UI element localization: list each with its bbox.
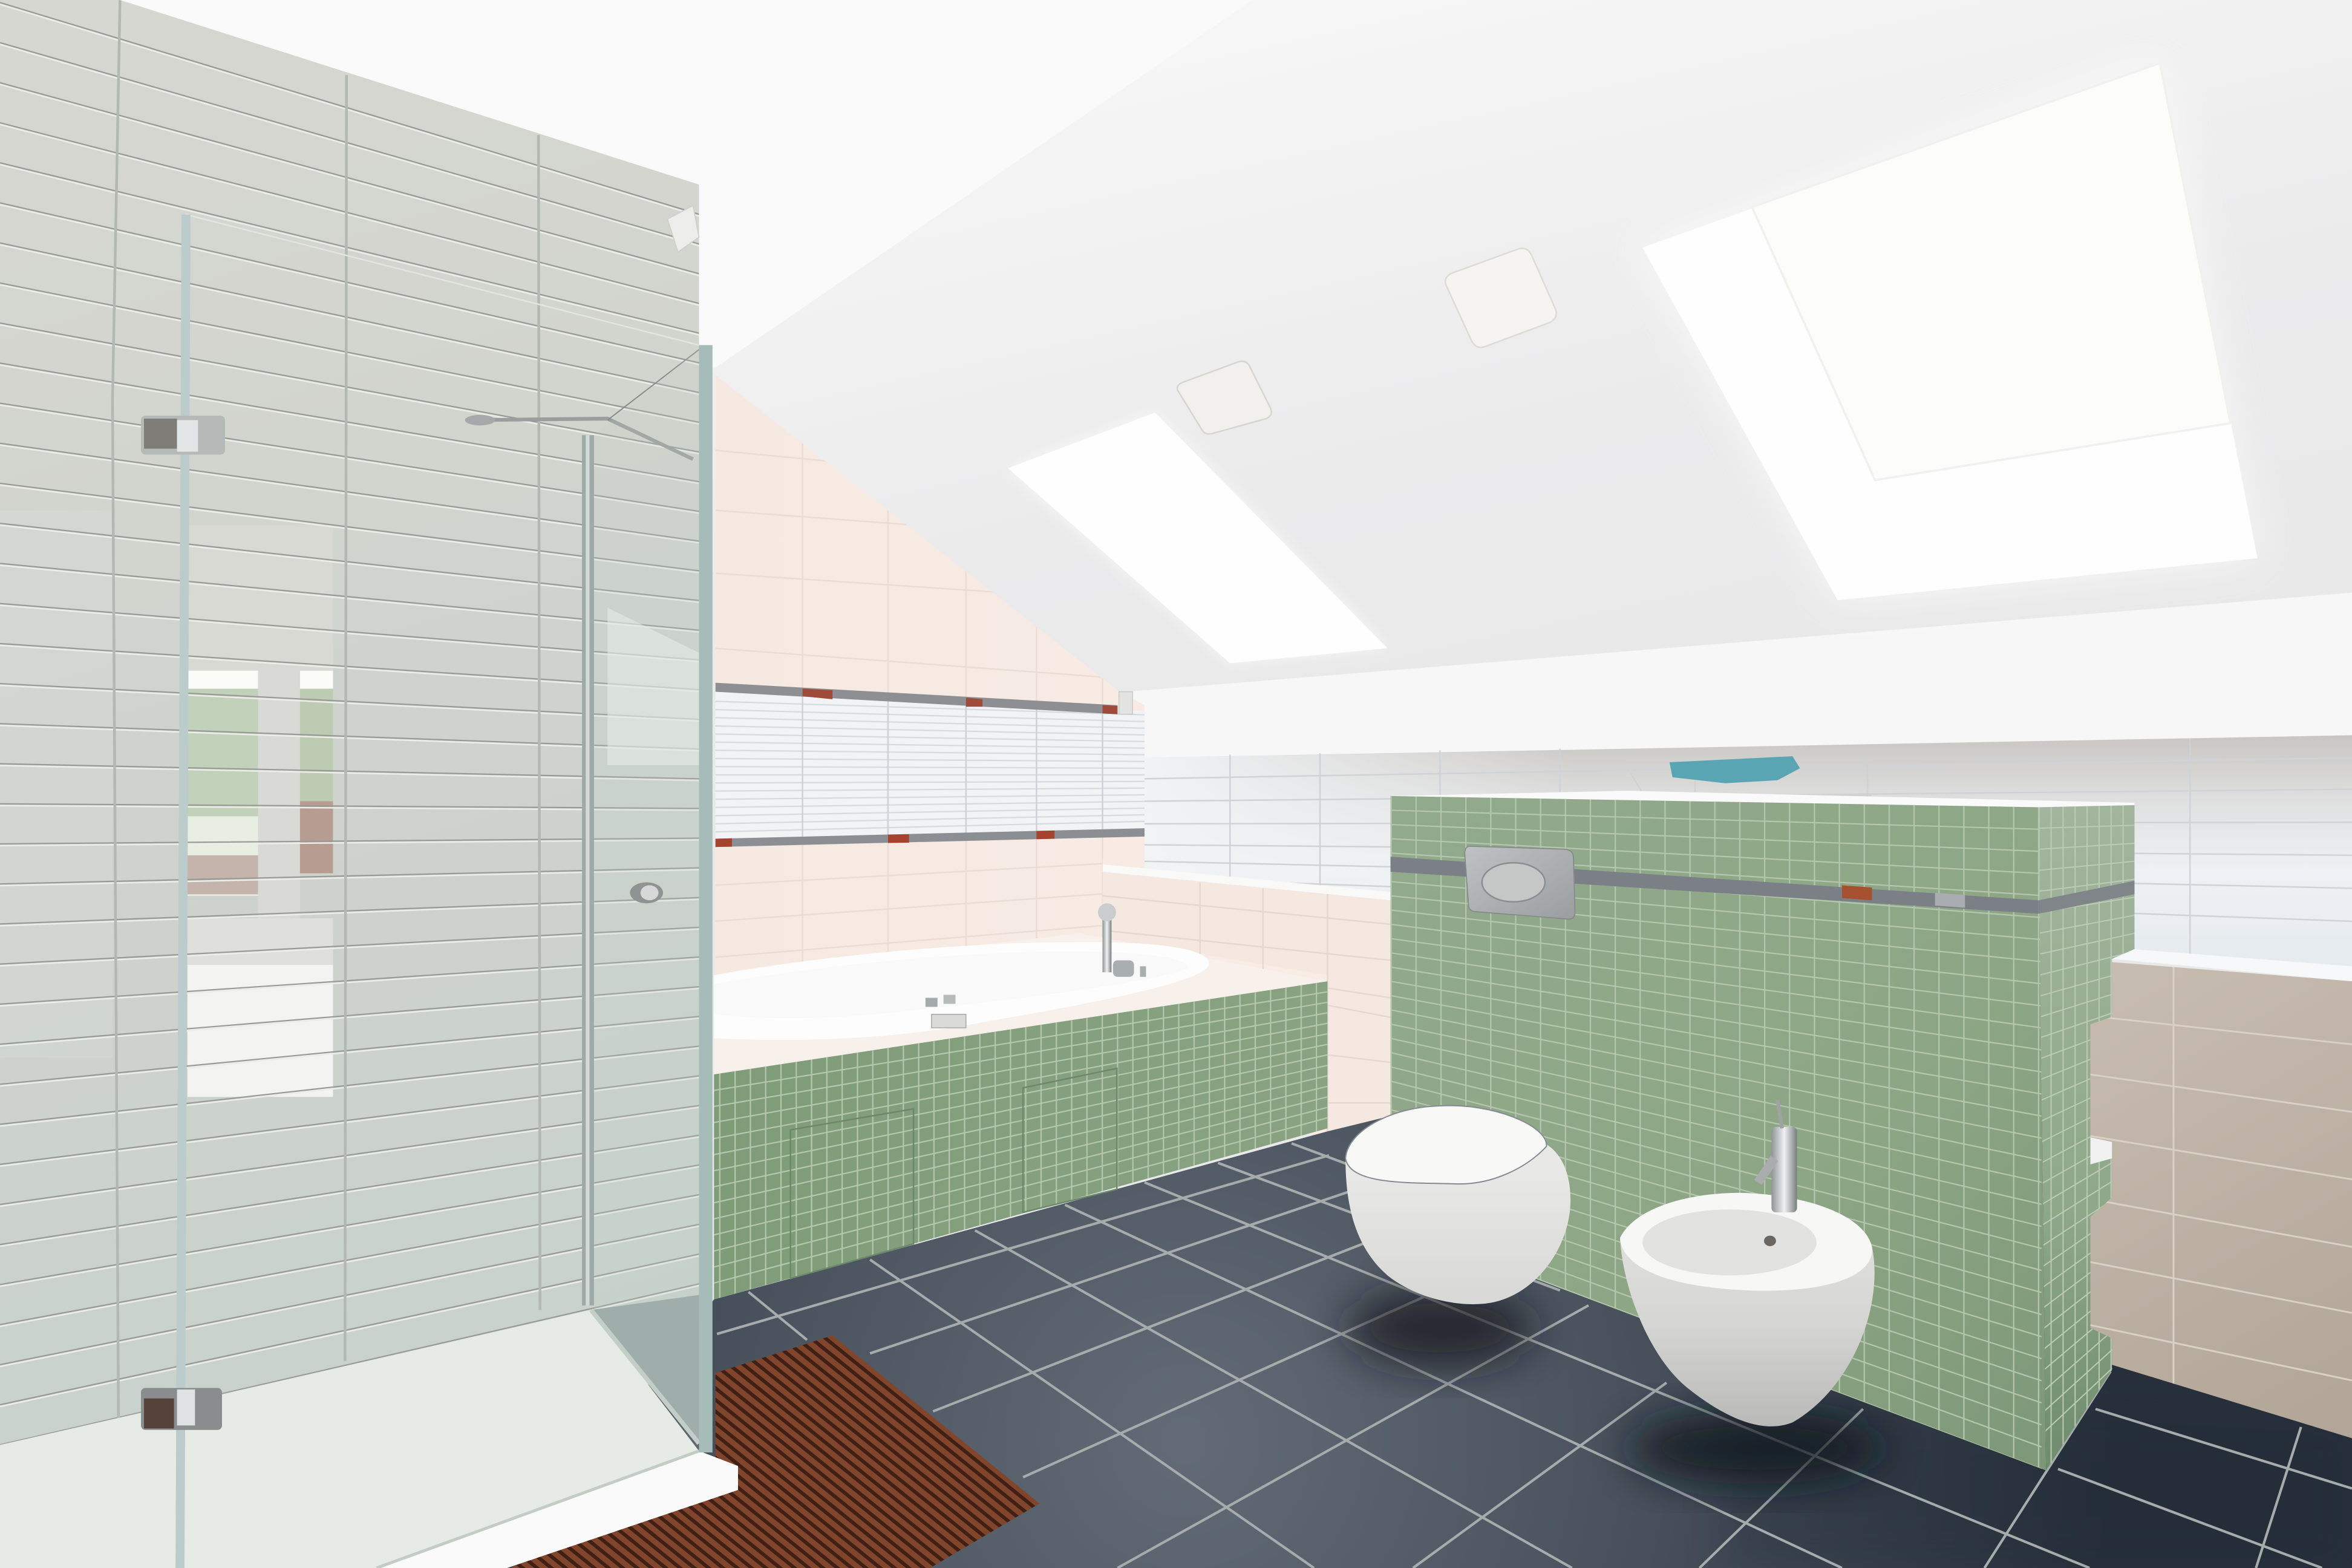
tub faucet and hand shower: [1098, 903, 1146, 977]
left glass reflection: [0, 510, 113, 1058]
white ledge: [2112, 949, 2352, 981]
flush button: [1482, 863, 1545, 902]
toilet lid: [1345, 1106, 1547, 1184]
wavy white tile band: [716, 690, 1145, 843]
lower hinge: [141, 1388, 222, 1430]
shadow under toilet: [1347, 1289, 1533, 1367]
skylight blind: [1752, 63, 2230, 480]
shower glass enclosure: [141, 215, 713, 1568]
utility box at wall corner: [1119, 691, 1132, 714]
tub side controls: [926, 995, 966, 1028]
access panel right: [1023, 1068, 1117, 1212]
white wall tiles: [1102, 735, 2352, 975]
shower head arm: [465, 350, 699, 459]
glass right edge: [699, 345, 713, 1452]
wall channel: [582, 435, 594, 1305]
towel: [1670, 756, 1800, 783]
drain: [1764, 1236, 1776, 1246]
access panel left: [791, 1109, 913, 1278]
partition side face: [2039, 795, 2137, 1474]
beige right wall: [2089, 949, 2352, 1438]
window reflection: [188, 525, 333, 1097]
bath front mosaic: [714, 975, 1329, 1305]
pink wall tiles above tub: [714, 375, 1327, 1136]
bidet: [1620, 1100, 1875, 1426]
towel rack: [1627, 756, 1872, 797]
niche shelf: [2091, 1137, 2112, 1165]
shadow under bidet: [1627, 1412, 1883, 1484]
partition top: [1391, 791, 2134, 807]
toilet: [1345, 1106, 1570, 1304]
large skylight: [1642, 63, 2258, 600]
decorative band lower: [716, 828, 1145, 847]
floor tile grout: [717, 1143, 2352, 1568]
shower tray: [0, 1295, 738, 1568]
ceiling vent large: [1445, 249, 1557, 347]
wall vent: [667, 206, 699, 252]
door edge: [180, 215, 186, 1568]
silver decorative band on partition: [1391, 857, 2039, 914]
floor: [507, 1115, 2352, 1568]
partition front mosaic: [1391, 795, 2051, 1474]
side glass panel: [594, 348, 699, 1451]
bathtub deck: [714, 933, 1327, 1074]
gable end wall: [120, 0, 1252, 368]
door knob: [630, 882, 663, 903]
ceiling vent small: [1177, 361, 1272, 434]
decorative band upper: [716, 683, 1117, 714]
small skylight: [1008, 413, 1388, 663]
wooden bath mat: [510, 1336, 1039, 1568]
shower tiled wall: [0, 0, 699, 1446]
bathtub: [714, 903, 1209, 1040]
tile joints: [0, 0, 699, 1446]
flush plate: [1465, 846, 1575, 919]
bidet faucet: [1758, 1100, 1797, 1212]
upper hinge: [141, 416, 225, 455]
soffit under ceiling: [1126, 593, 2352, 759]
tub-side pink tiles and ledge: [1102, 864, 1391, 1136]
bidet bowl: [1642, 1209, 1817, 1275]
